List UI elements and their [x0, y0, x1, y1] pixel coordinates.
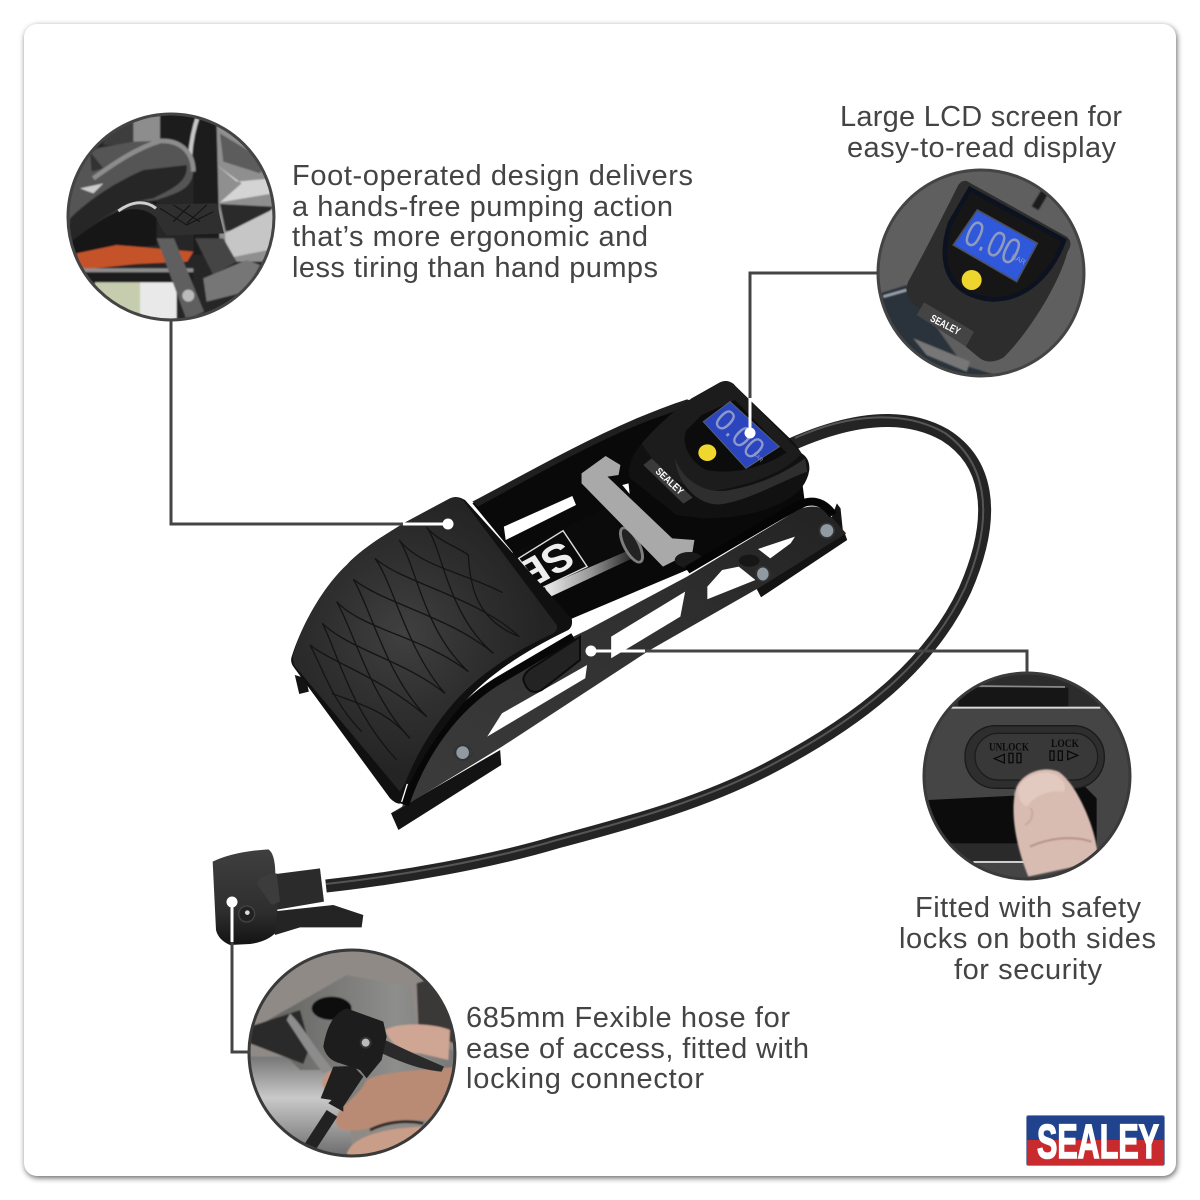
black arc below pedal: [405, 637, 573, 805]
text: flexible hose: locking connector: [466, 1063, 704, 1095]
LCD reading: 0.00: [707, 403, 771, 466]
cylinder label: [519, 531, 587, 588]
cylinder brand text: SE: [507, 533, 583, 598]
upper frame rail: [472, 399, 698, 507]
connector mound: [257, 873, 280, 905]
text: LCD screen: [840, 101, 1122, 164]
text: flexible hose: 685mm Fexible hose for: [466, 1002, 790, 1034]
BAR unit: BAR: [751, 451, 764, 464]
text: LCD screen: Large LCD screen for: [840, 101, 1122, 133]
pedal bolt: [455, 745, 470, 760]
leader line: LCD: [744, 273, 878, 438]
gauge brand text: SEALEY: [653, 466, 685, 498]
safety lock button: [523, 637, 580, 692]
rear and front rubber feet: [295, 503, 847, 830]
side plate: [393, 507, 846, 813]
gauge brand plate: [643, 458, 693, 504]
leader line: connector: [226, 896, 250, 1052]
pedal tread in photo: [160, 205, 213, 225]
leader line: pedal: [171, 320, 454, 530]
connector rivet: [239, 906, 255, 922]
lock arrow marks: [1050, 751, 1078, 760]
connector in photo: [323, 1008, 387, 1078]
LCD reading in photo: 0.00: [958, 211, 1027, 273]
valve stem: [321, 1066, 363, 1112]
pedal face: [293, 498, 557, 792]
text: foot-operated design: [292, 160, 693, 284]
connector sleeve: [268, 868, 324, 910]
gauge housing in photo: [907, 181, 1070, 361]
pedal: [291, 497, 580, 805]
leader line: lock: [586, 646, 1027, 672]
foot pump body: [291, 381, 847, 830]
LCD screen in photo: [953, 210, 1037, 282]
text: safety locks: Fitted with safety: [915, 892, 1142, 924]
aluminium bracket: [582, 456, 694, 567]
text: flexible hose: ease of access, fitted with: [466, 1033, 809, 1065]
photo circle: safety lock: [922, 672, 1132, 880]
text: LCD screen: easy-to-read display: [847, 132, 1116, 164]
text: foot-operated design: less tiring than hand pumps: [292, 252, 658, 284]
finger: [1014, 769, 1098, 877]
text: safety locks: locks on both sides: [899, 923, 1156, 955]
connector lever: [272, 905, 363, 935]
LOCK label: LOCK: [1051, 736, 1080, 750]
side plate slots: [487, 537, 795, 737]
gauge face in photo: [945, 189, 1064, 299]
brand plate in photo: [917, 302, 974, 347]
gauge button: [698, 444, 716, 461]
small gap beside bracket: [622, 483, 630, 494]
frame screws: [454, 523, 834, 760]
gauge housing: [629, 381, 809, 518]
pedal in photo: [118, 200, 224, 236]
white gap behind cylinder: [504, 496, 576, 540]
pedal rim: [291, 497, 572, 804]
gauge top shell: [642, 382, 802, 491]
text: foot-operated design: that’s more ergonomic and: [292, 221, 648, 253]
BAR unit: BAR: [1010, 252, 1027, 267]
photo circle: LCD screen: [876, 168, 1086, 378]
unlock arrow marks: [994, 753, 1021, 763]
hose connector: [213, 849, 363, 945]
piston cylinder: [511, 508, 637, 598]
gauge: [629, 381, 809, 518]
frame and cylinder: [295, 399, 847, 830]
air hose: [326, 417, 985, 886]
connector lever in photo: [382, 1040, 444, 1072]
cylinder chrome band: [545, 550, 634, 597]
side plate glossy edge: [687, 502, 833, 570]
brand text in photo: SEALEY: [928, 313, 962, 338]
lock slider: [965, 726, 1104, 788]
gauge gloss rim: [675, 458, 807, 504]
pedal tread pattern: [310, 527, 519, 760]
UNLOCK label: UNLOCK: [989, 739, 1029, 753]
gauge face: [685, 400, 787, 472]
text: foot-operated design: Foot-operated design delivers: [292, 160, 693, 192]
dark slot window: [928, 787, 1097, 849]
text: foot-operated design: a hands-free pumping action: [292, 191, 673, 223]
text: safety locks: [899, 892, 1156, 986]
text: flexible hose: [466, 1002, 809, 1095]
connector head: [213, 849, 277, 945]
interior of frame: [472, 402, 805, 620]
LCD screen: [703, 402, 779, 468]
photo circle: connector on valve: [243, 947, 460, 1160]
valve rod: [305, 1110, 337, 1148]
photo circle: foot on pedal: [66, 112, 276, 322]
edge highlight: [402, 784, 407, 802]
text: safety locks: for security: [954, 954, 1102, 986]
cylinder collar: [616, 525, 647, 565]
rear spindle: [739, 555, 760, 567]
bracket bolt: [675, 552, 703, 568]
yellow power button: [962, 270, 982, 290]
